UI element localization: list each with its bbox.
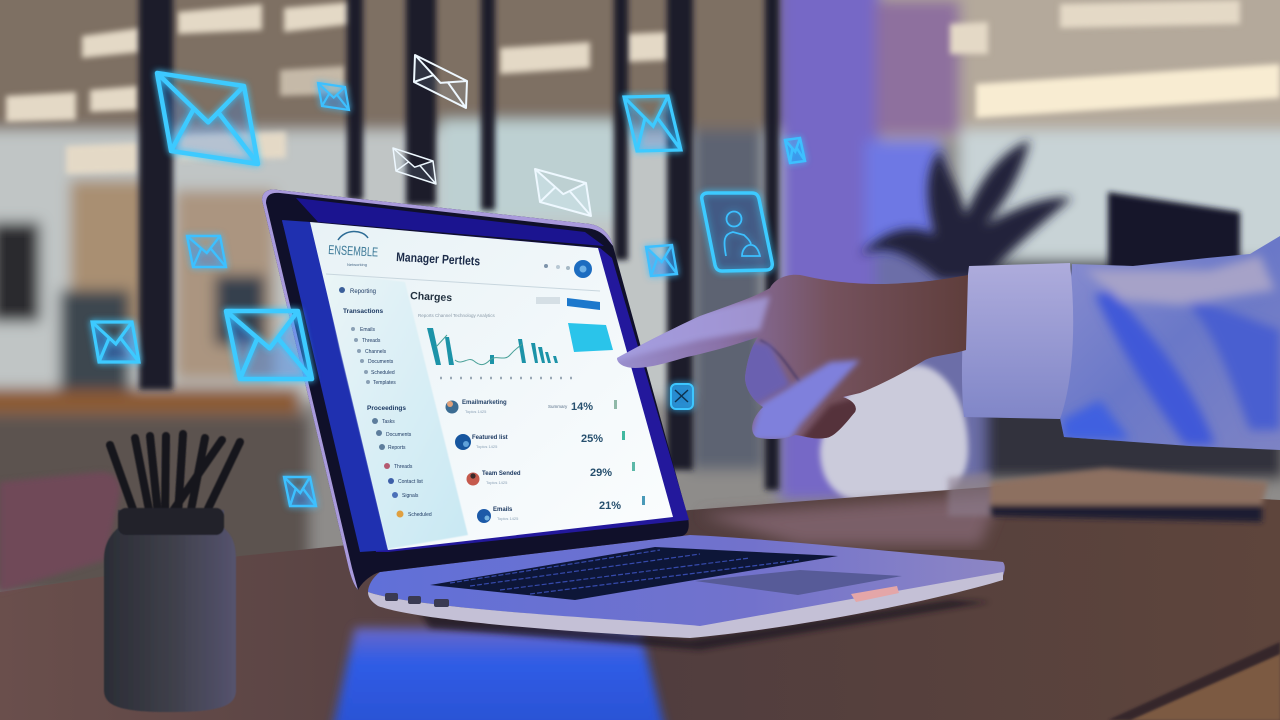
display blue frame (282, 221, 689, 552)
table row 1: Summary (548, 404, 568, 409)
table row 2: Featured list (472, 435, 508, 441)
shirt cuff (962, 263, 1073, 419)
sidebar navigation: Documents (386, 432, 412, 438)
side ports (385, 593, 449, 607)
pointing hand (617, 274, 968, 439)
laptop shadow (420, 600, 990, 650)
icon: small envelope (318, 83, 349, 110)
table row 2 (455, 431, 625, 450)
pencil cup (104, 434, 240, 712)
icon: contact card (702, 193, 772, 271)
sidebar navigation: Contact list (398, 479, 423, 485)
sidebar navigation: Reports (388, 445, 406, 451)
dashboard main area (310, 222, 673, 550)
pink chair (0, 472, 120, 592)
sidebar navigation: Threads (394, 464, 413, 470)
background monitor (1108, 192, 1240, 272)
cup collar (118, 508, 224, 535)
sidebar navigation: Proceedings (367, 405, 406, 412)
lid edge highlight (262, 189, 613, 590)
sidebar navigation: Templates (373, 380, 396, 386)
table row 3 (466, 462, 635, 486)
floating envelope icons (92, 73, 805, 506)
table row 1: 14% (571, 401, 593, 413)
white outlined envelopes (393, 55, 591, 216)
table row 2: Topics 1425 (476, 444, 498, 449)
dashboard contents (326, 231, 645, 523)
icon: rounded small badge (671, 384, 693, 409)
hand creases (760, 340, 800, 382)
curled fingers (800, 398, 856, 438)
table row 4 (477, 496, 645, 523)
sidebar navigation: Signals (402, 493, 419, 499)
bar chart (427, 328, 572, 378)
table row 3: Team Sended (482, 471, 521, 477)
table row 4: 21% (599, 500, 621, 512)
sleeve folds (1062, 255, 1280, 445)
icon: envelope near laptop (646, 245, 677, 276)
white vase (820, 365, 968, 506)
sidebar navigation: Documents (368, 359, 394, 365)
soft lit area of table behind laptop (700, 495, 1000, 545)
keyboard (430, 547, 838, 600)
thumb (750, 360, 860, 440)
pens (110, 434, 240, 515)
icon: large envelope beside laptop (226, 311, 312, 379)
blue screen reflection on table (330, 628, 668, 720)
blue button (567, 298, 600, 310)
logo: ENSEMBLE (328, 242, 379, 260)
icon: white envelope top (414, 55, 467, 108)
table row 4: Emails (493, 507, 513, 513)
laptop (262, 189, 1005, 650)
books on the table (948, 468, 1268, 522)
sidebar navigation: Scheduled (371, 370, 395, 376)
icon: envelope far left (92, 322, 139, 362)
icon: envelope cyan upper middle (624, 96, 681, 151)
logo (328, 231, 379, 267)
hand side shade (740, 340, 790, 405)
chart subtitle: Reports Channel Technology Analytics (418, 313, 495, 318)
icon: white envelope middle (535, 169, 591, 216)
sidebar navigation: Threads (362, 338, 381, 344)
charts heading: Charges (410, 290, 453, 304)
laptop front edge (368, 572, 1003, 638)
sidebar navigation: Channels (365, 349, 387, 355)
sidebar navigation: Emails (360, 327, 376, 333)
table (0, 486, 1280, 720)
header icons (544, 260, 592, 278)
icon: large envelope top left (157, 73, 258, 164)
laptop lid (262, 189, 689, 590)
pink led (851, 586, 899, 602)
icon: white envelope small (393, 148, 436, 184)
icon: envelope bottom left (284, 477, 316, 506)
icon: envelope left (187, 236, 226, 267)
table row 3: 29% (590, 467, 612, 479)
sidebar navigation: Reporting (350, 289, 376, 295)
table row 1 (446, 400, 617, 414)
glass wall columns (139, 0, 779, 490)
sidebar navigation: Tasks (382, 419, 395, 425)
sidebar navigation: Scheduled (408, 512, 432, 518)
trackpad (695, 570, 902, 595)
sidebar icons (339, 287, 404, 518)
header divider (326, 274, 600, 291)
table row 1: Emailmarketing (462, 400, 507, 406)
sidebar navigation: Transactions (343, 308, 383, 315)
finger highlight (610, 296, 770, 362)
table corner (1130, 652, 1280, 720)
icon: small envelope right (785, 138, 805, 163)
logo: Networking (347, 262, 367, 267)
table row 4: Topics 1425 (497, 516, 519, 521)
table row 3: Topics 1425 (486, 480, 508, 485)
table row 2: 25% (581, 433, 603, 445)
laptop base deck (368, 535, 1005, 628)
cyan callout box (568, 323, 613, 352)
shirt sleeve (1060, 236, 1280, 450)
table row 1: Topics 1425 (465, 409, 487, 414)
background plant (860, 140, 1072, 280)
sidebar navigation (343, 289, 432, 518)
left screen strip (282, 220, 390, 552)
dashboard title: Manager Pertlets (396, 250, 480, 268)
ceiling lights (6, 0, 1280, 174)
dashboard sidebar (323, 272, 468, 549)
date filter (536, 297, 560, 304)
